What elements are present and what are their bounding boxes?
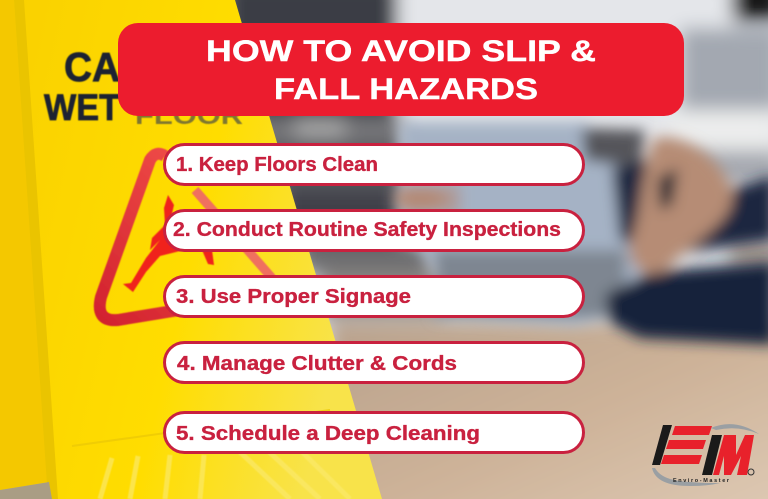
list item 5 [164, 412, 584, 452]
list item 1: 1. Keep Floors Clean [176, 154, 378, 176]
person [394, 122, 768, 345]
warning triangle [100, 154, 272, 320]
sign text: CA [64, 44, 120, 90]
title banner [118, 23, 684, 116]
sign text [44, 44, 120, 128]
list item 2 [164, 210, 584, 250]
list item 3 [164, 276, 584, 316]
logo: Enviro-Master: Enviro-Master [673, 478, 730, 484]
list item 3: 3. Use Proper Signage [176, 286, 411, 308]
list item 2: 2. Conduct Routine Safety Inspections [173, 219, 561, 241]
list item 4: 4. Manage Clutter & Cords [177, 353, 457, 375]
list item 5: 5. Schedule a Deep Cleaning [176, 423, 480, 445]
wet floor sign [0, 0, 382, 499]
list item 1 [164, 144, 584, 184]
title text [206, 35, 596, 106]
title text: FALL HAZARDS [274, 73, 538, 106]
logo: Enviro-Master [652, 424, 759, 486]
faded floor word: FLOOR [135, 102, 243, 130]
title text: HOW TO AVOID SLIP & [206, 35, 596, 68]
sign text: WET [44, 87, 120, 128]
list item 4 [164, 342, 584, 382]
